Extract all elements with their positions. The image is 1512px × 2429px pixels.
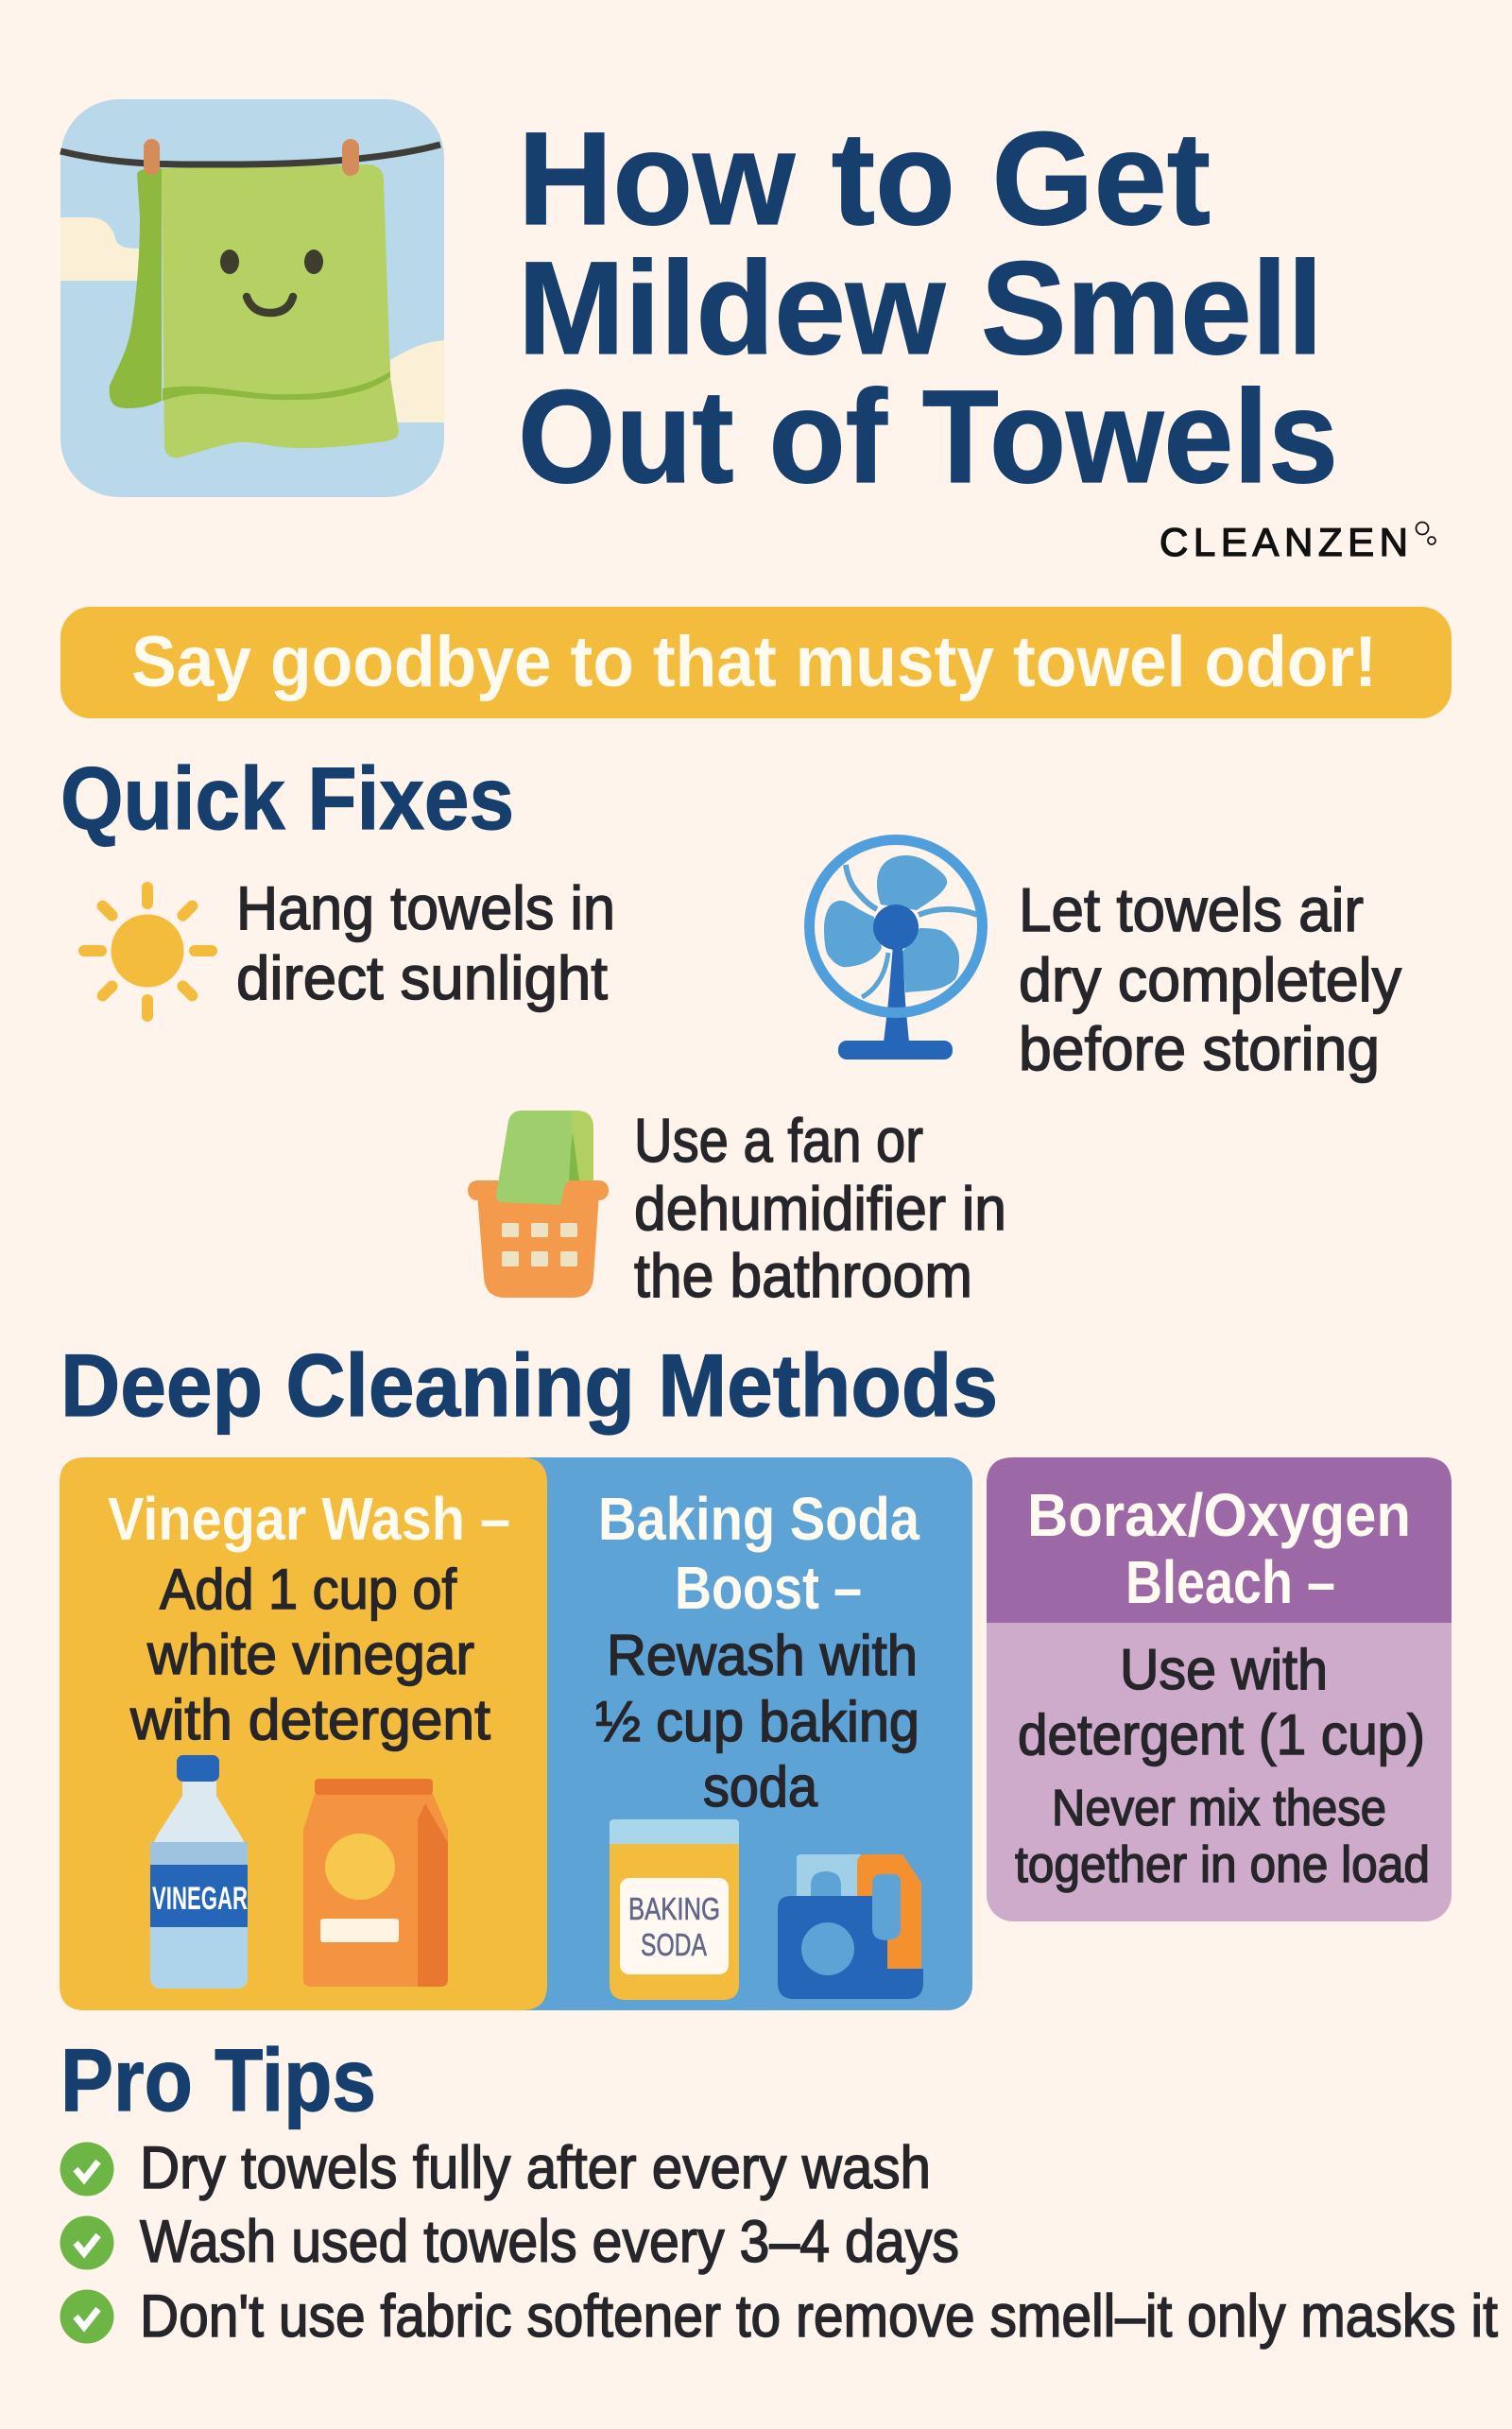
heading: Deep Cleaning Methods: Deep Cleaning Methods: [60, 1335, 998, 1435]
title: Mildew Smell: [518, 233, 1323, 382]
icon: laundry basket with towel: [468, 1111, 609, 1298]
tip: dry towels: Dry towels fully after every wash: [140, 2135, 931, 2201]
icon: fan: [809, 839, 983, 1059]
icon: baking soda jar: BAKING: [628, 1891, 720, 1926]
quick fix: fan or dehumidifier: the bathroom: [634, 1241, 972, 1310]
quick fix: hang towels in sunlight: direct sunlight: [236, 943, 608, 1012]
icon: baking soda jar: [610, 1819, 739, 2000]
panel: baking soda boost: ½ cup baking: [595, 1690, 919, 1753]
icon: orange box: [303, 1779, 448, 1987]
panel: borax / oxygen bleach: Use with: [1120, 1638, 1328, 1701]
heading: Quick Fixes: Quick Fixes: [60, 749, 514, 848]
quick fix: air dry completely: [809, 839, 1401, 1083]
quick fix: air dry completely: dry completely: [1019, 945, 1401, 1014]
quick fix: hang towels in sunlight: Hang towels in: [236, 873, 615, 942]
panel: baking soda boost: [491, 1457, 972, 2010]
icon: smiling towel on clothesline: [60, 99, 444, 497]
quick fix: hang towels in sunlight: [78, 873, 615, 1022]
icon: check: [60, 2289, 113, 2344]
icon: baking soda jar: SODA: [641, 1927, 707, 1962]
icon: detergent jug: [778, 1854, 923, 1999]
icon: vinegar bottle: [150, 1755, 248, 1989]
banner: Say goodbye to that musty towel odor!: [131, 622, 1377, 702]
heading: Pro Tips: Pro Tips: [60, 2030, 376, 2129]
panel: vinegar wash: Add 1 cup of: [160, 1558, 456, 1621]
title: How to Get: [518, 104, 1211, 252]
quick fix: fan or dehumidifier: Use a fan or: [634, 1106, 923, 1175]
quick fix: fan or dehumidifier: [468, 1106, 1006, 1310]
icon: check: [60, 2215, 113, 2270]
panel: vinegar wash: Vinegar Wash –: [108, 1485, 510, 1553]
panel: vinegar wash: [60, 1457, 547, 2010]
panel: borax / oxygen bleach: [987, 1457, 1452, 1921]
icon: vinegar bottle: VINEGAR: [152, 1881, 248, 1917]
icon: sun: [78, 882, 217, 1022]
panel: borax / oxygen bleach: Borax/Oxygen: [1027, 1481, 1411, 1549]
panel: baking soda boost: soda: [703, 1755, 818, 1818]
panel: baking soda boost: Boost –: [675, 1554, 862, 1622]
panel: vinegar wash: white vinegar: [146, 1623, 474, 1686]
tip: wash every 3-4 days: Wash used towels every 3–4 days: [140, 2209, 959, 2275]
quick fix: fan or dehumidifier: dehumidifier in: [634, 1174, 1006, 1243]
panel: borax / oxygen bleach: together in one load: [1015, 1836, 1430, 1893]
quick fix: air dry completely: Let towels air: [1019, 875, 1364, 944]
panel: borax / oxygen bleach: Bleach –: [1125, 1548, 1335, 1616]
title: Out of Towels: [518, 362, 1338, 510]
quick fix: air dry completely: before storing: [1019, 1014, 1380, 1083]
icon: check: [60, 2142, 113, 2196]
panel: vinegar wash: with detergent: [129, 1688, 490, 1751]
panel: baking soda boost: Baking Soda: [598, 1485, 919, 1553]
panel: borax / oxygen bleach: detergent (1 cup): [1018, 1703, 1425, 1766]
panel: borax / oxygen bleach: Never mix these: [1052, 1780, 1386, 1836]
panel: baking soda boost: Rewash with: [607, 1624, 918, 1687]
logo: Cleanzen: CLEANZEN: [1160, 520, 1408, 564]
title: [518, 104, 1338, 510]
banner: [60, 607, 1452, 718]
